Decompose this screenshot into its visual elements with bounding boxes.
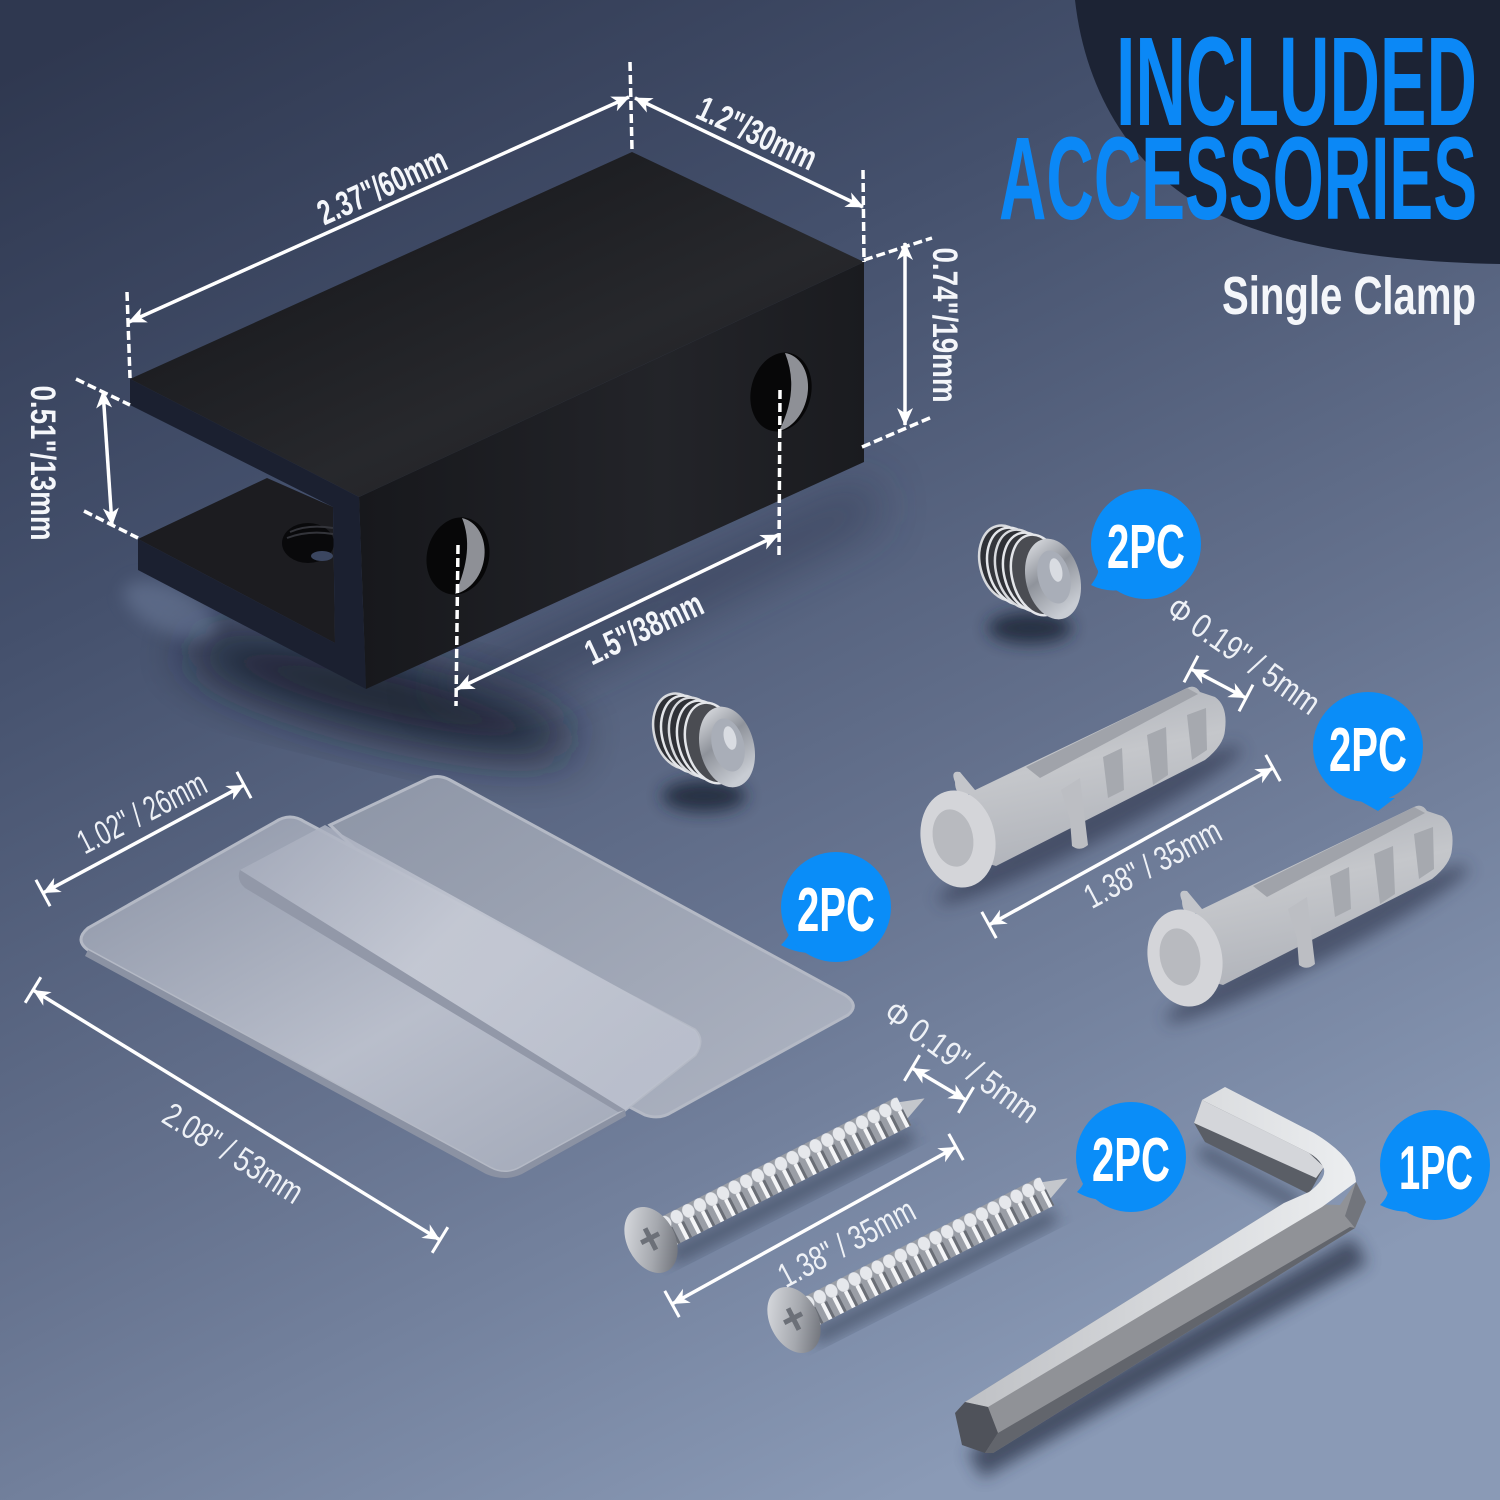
quantity badges: [781, 489, 1490, 1220]
plastic wall anchor 1: [912, 687, 1250, 918]
badge: pads 2PC: 2PC: [797, 876, 875, 945]
badge: screws 2PC: [1076, 1102, 1186, 1212]
screw dimensions: [672, 993, 1046, 1304]
dim: anchor length: [989, 768, 1273, 925]
dim: width 1.2: [635, 89, 864, 262]
anchor flange: [912, 783, 1004, 895]
clear adhesive pads: [81, 776, 853, 1178]
side hole right: [742, 346, 820, 438]
set screw with clear tip, upper: [972, 520, 1089, 644]
dim: pad length: 2.08" / 53mm: [156, 1096, 310, 1212]
anchor dimensions: [989, 589, 1327, 925]
title banner: [999, 0, 1500, 326]
dim: anchor length: 1.38" / 35mm: [1078, 812, 1228, 916]
clamp front C-profile edge: [130, 379, 366, 689]
dim: opening 0.51: [23, 379, 138, 540]
badge: set screws 2PC: 2PC: [1107, 513, 1185, 582]
key top bright face: [965, 1087, 1356, 1407]
dim: screw diameter: Φ 0.19" / 5mm: [877, 993, 1046, 1131]
key end hex face: [955, 1402, 998, 1453]
key long arm middle face: [965, 1182, 1366, 1453]
badge: set screws 2PC: [1091, 489, 1201, 599]
hex allen key: [955, 1087, 1366, 1465]
dim: width 1.2: 1.2"/30mm: [691, 89, 823, 178]
black U clamp: [130, 152, 864, 689]
dim: length 2.37: 2.37"/60mm: [311, 140, 453, 233]
pad dimensions: [33, 764, 440, 1240]
anchor fin: [1061, 778, 1088, 849]
dim: opening 0.51: 0.51"/13mm: [23, 386, 62, 540]
dim: height 0.74: [862, 238, 964, 447]
title: included accessories: [999, 11, 1477, 245]
front pad: [81, 817, 700, 1172]
badge: allen key 1PC: [1380, 1110, 1490, 1220]
key long arm lower face: [985, 1227, 1355, 1453]
dim: hole spacing 1.5: 1.5"/38mm: [579, 584, 709, 673]
badge: anchors 2PC: [1313, 692, 1423, 811]
badge: anchors 2PC: 2PC: [1329, 716, 1407, 785]
wood screw 2: [757, 1149, 1084, 1362]
key inner side faces: [1194, 1100, 1324, 1194]
dim: pad length: [33, 990, 440, 1240]
lower plate top face: [138, 478, 335, 643]
dim: height 0.74: 0.74"/19mm: [925, 248, 964, 402]
clamp top face: [130, 152, 864, 497]
dim: anchor diameter: Φ 0.19" / 5mm: [1160, 589, 1327, 723]
threaded hole in lower plate: [282, 523, 334, 563]
dim: screw length: 1.38" / 35mm: [772, 1191, 922, 1295]
dim: screw length: [672, 1147, 956, 1304]
dim: length 2.37: [127, 62, 632, 378]
dim: pad width: [43, 764, 244, 893]
plastic wall anchor 2: [1139, 806, 1477, 1037]
wood screw 1: [614, 1069, 941, 1282]
clamp long side face: [359, 262, 864, 689]
badge: screws 2PC: 2PC: [1092, 1126, 1170, 1195]
dim: pad width: 1.02" / 26mm: [71, 764, 213, 862]
clamp dimensions: [23, 62, 964, 706]
back pad: [330, 776, 853, 1117]
dim: hole spacing 1.5: [456, 390, 780, 706]
badge: pads 2PC: [781, 852, 891, 962]
side hole left: [418, 511, 498, 601]
raised strip on pad: [240, 825, 700, 1110]
set screw with clear tip, lower: [646, 688, 763, 812]
